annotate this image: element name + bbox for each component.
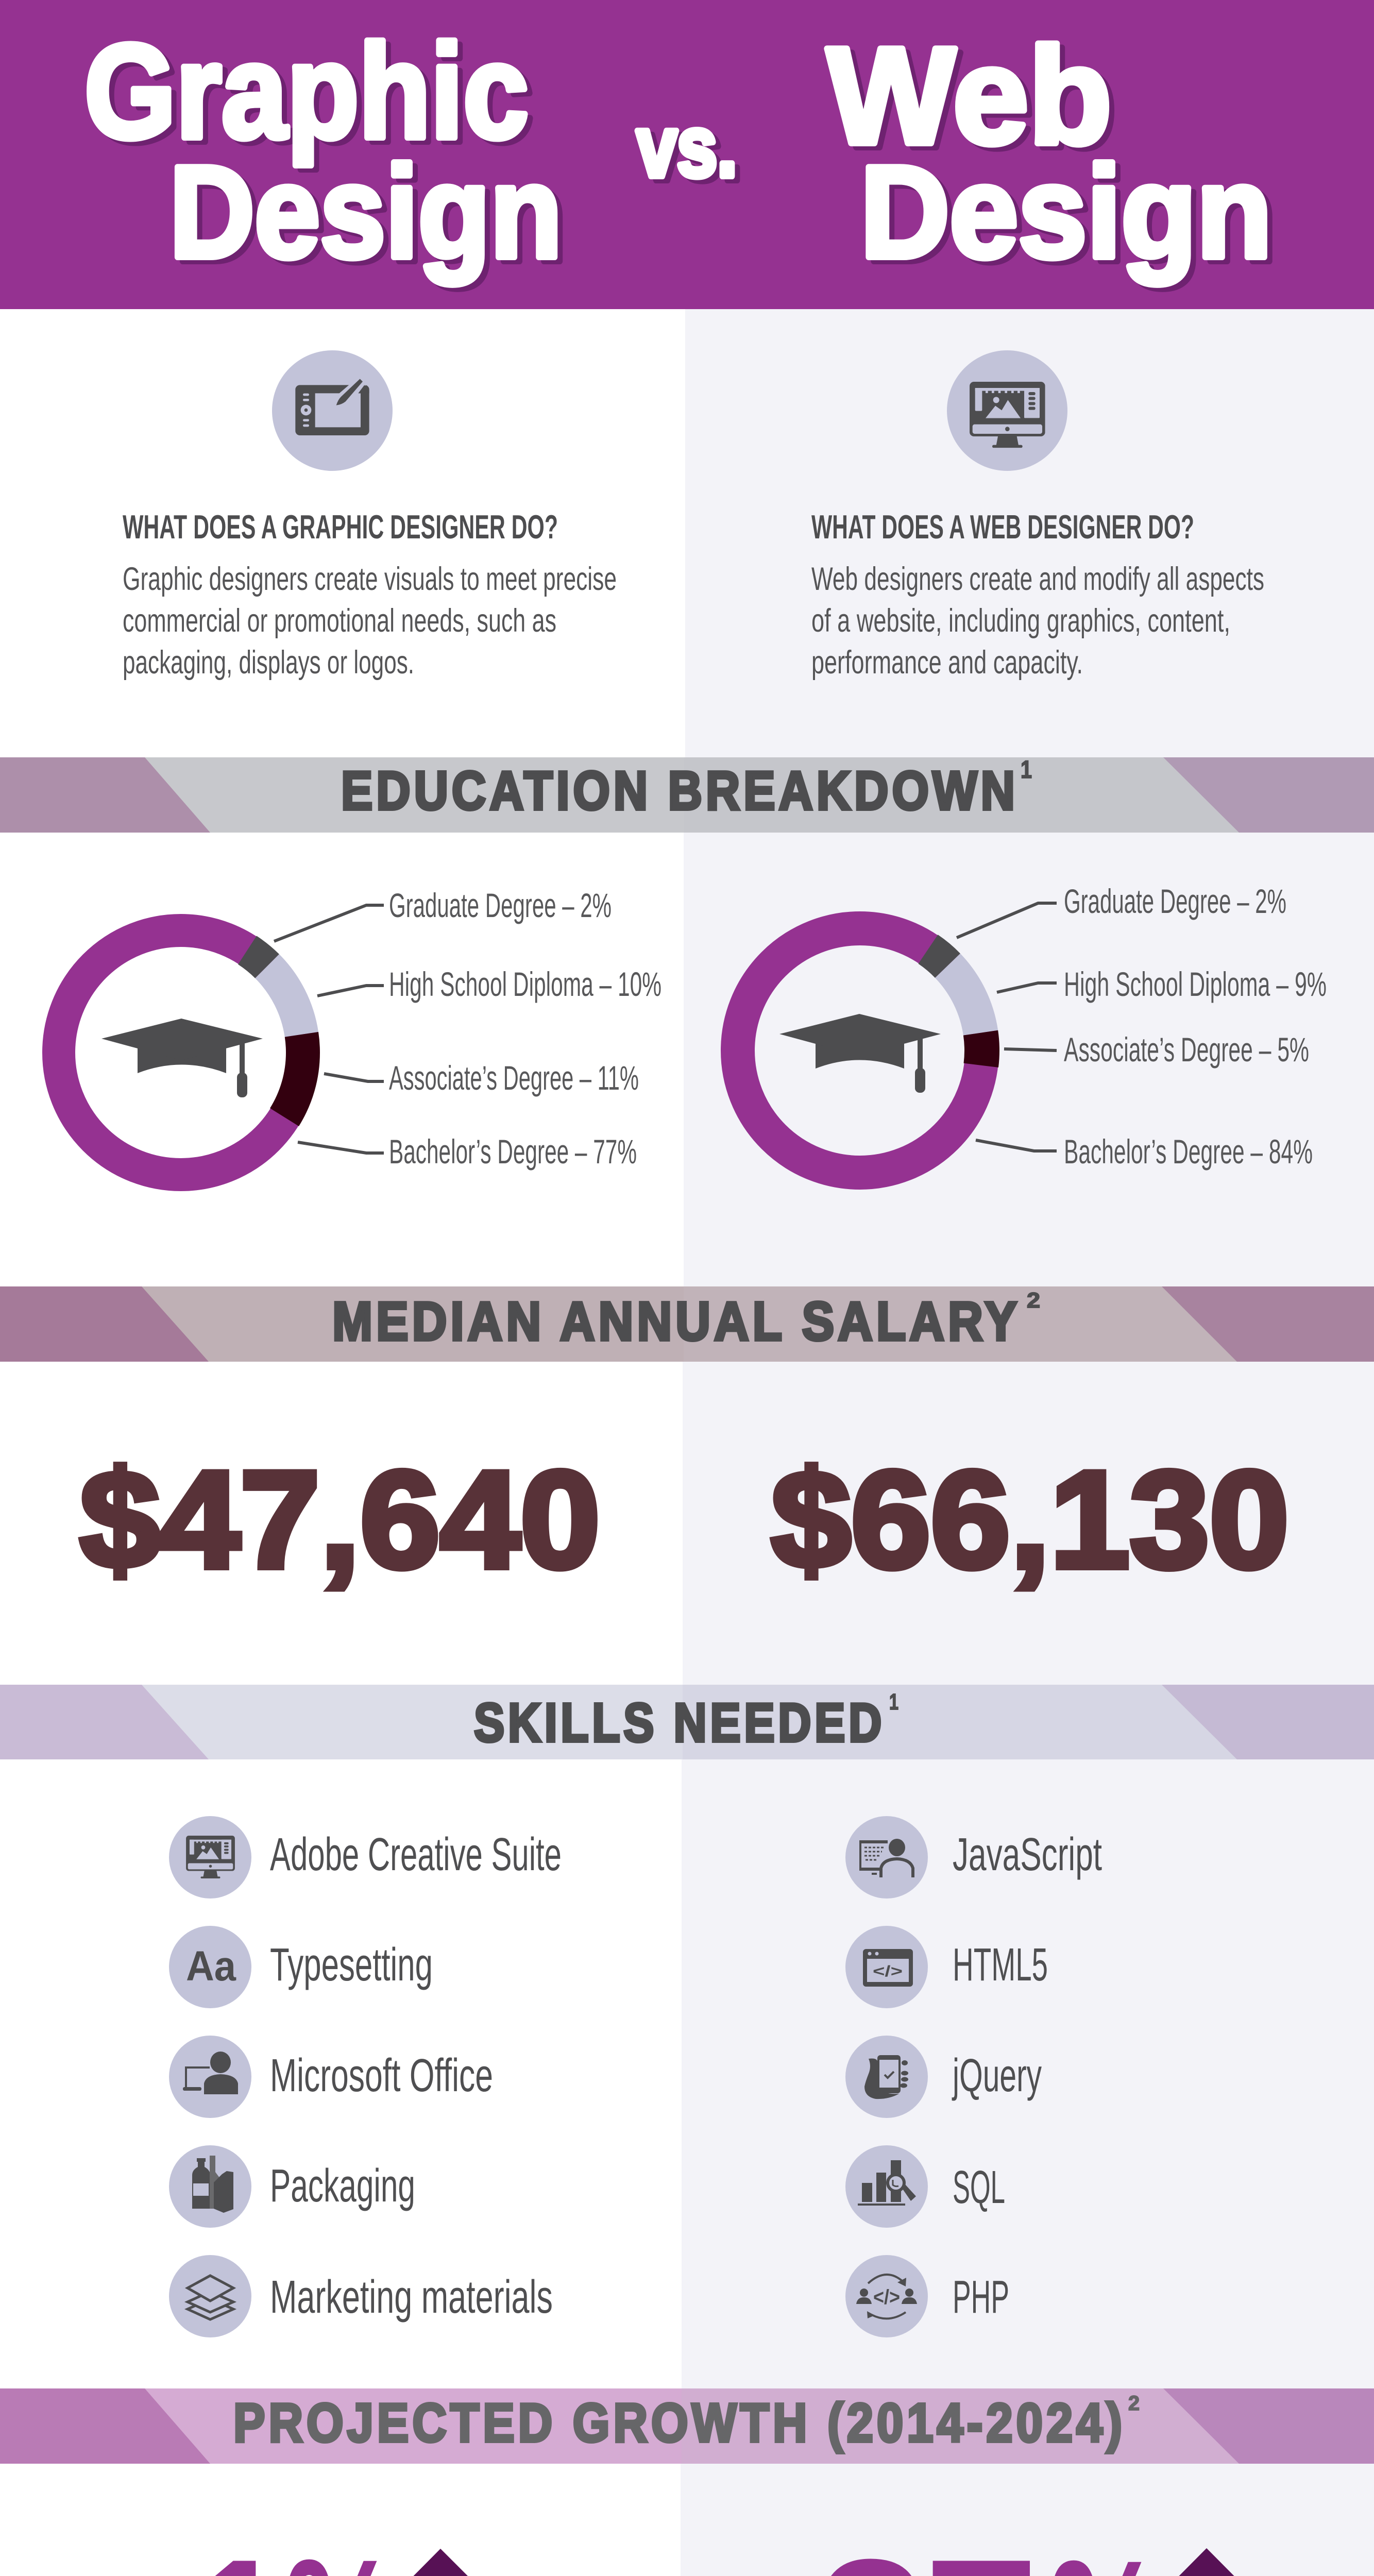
skill: microsoft office: Microsoft Office: [270, 2050, 493, 2102]
panel: web design skills: [845, 1816, 1102, 2337]
title: Design: [169, 139, 562, 285]
section banner: median annual salary: [0, 1286, 1374, 1362]
skill: html5: HTML5: [953, 1939, 1048, 1991]
panel: graphic design skills: [169, 1816, 562, 2337]
skill: html5: [845, 1926, 1048, 2008]
icon: drawing tablet: [272, 350, 393, 471]
skill: php: [845, 2255, 1009, 2337]
skill: typesetting: Aa: [186, 1943, 236, 1990]
title: vs.: [637, 99, 737, 195]
description: packaging, displays or logos.: [123, 645, 414, 681]
chart labels: graphic design education: High School Diploma – 10%: [389, 965, 661, 1003]
skill: sql: [845, 2145, 1005, 2228]
skill: marketing materials: [169, 2255, 553, 2337]
skill: packaging: [169, 2145, 415, 2228]
skill: javascript: [845, 1816, 1102, 1899]
panel: what does a graphic designer do: [123, 350, 617, 681]
title: Web: [827, 19, 1112, 173]
stat: web design growth 27%: [816, 2517, 1262, 2576]
section banner: skills needed: SKILLS NEEDED: [474, 1692, 885, 1753]
icon: desktop monitor: [947, 350, 1067, 471]
title: Design: [860, 139, 1272, 285]
skill: php: PHP: [953, 2272, 1009, 2323]
salary: web design: $66,130: [771, 1442, 1289, 1597]
stat: graphic design growth 1%: [196, 2516, 496, 2576]
chart labels: graphic design education: Bachelor’s Degree – 77%: [389, 1132, 637, 1171]
panel: what does a web designer do: [811, 350, 1264, 681]
arrow up: [385, 2549, 496, 2576]
description: Graphic designers create visuals to meet precise: [123, 561, 617, 597]
skill: typesetting: Typesetting: [270, 1939, 433, 1991]
chart labels: graphic design education: Graduate Degree – 2%: [389, 886, 612, 924]
arrow up: [1151, 2548, 1262, 2576]
skill: html5: </>: [873, 1963, 903, 1980]
header banner: [0, 0, 1374, 309]
skill: adobe creative suite: [169, 1816, 562, 1899]
icon: graduation cap: [779, 1014, 941, 1093]
chart labels: graphic design education: Associate’s Degree – 11%: [389, 1059, 639, 1097]
section banner: projected growth: PROJECTED GROWTH (2014-2024): [233, 2393, 1126, 2453]
heading: WHAT DOES A GRAPHIC DESIGNER DO?: [123, 508, 558, 546]
section banner: education breakdown: 1: [1021, 756, 1032, 784]
skill: typesetting: [169, 1926, 433, 2008]
skill: jquery: [845, 2036, 1042, 2118]
panel: right column background: [681, 309, 1374, 2576]
section banner: median annual salary: 2: [1027, 1288, 1040, 1312]
description: [811, 561, 1264, 681]
skill: php: </>: [873, 2286, 900, 2309]
skill: marketing materials: Marketing materials: [270, 2272, 553, 2323]
title: Graphic: [84, 17, 529, 167]
section banner: skills needed: 1: [889, 1689, 898, 1715]
description: [123, 561, 617, 681]
section banner: median annual salary: MEDIAN ANNUAL SALARY: [332, 1291, 1021, 1352]
skill: microsoft office: [169, 2036, 493, 2118]
section banner: skills needed: [0, 1685, 1374, 1759]
chart: graphic design education donut: [59, 930, 303, 1175]
section banner: education breakdown: [0, 756, 1374, 833]
description: commercial or promotional needs, such as: [123, 603, 556, 639]
chart labels: graphic design education: [274, 886, 661, 1171]
section banner: education breakdown: EDUCATION BREAKDOWN: [341, 760, 1019, 821]
salary: graphic design: $47,640: [80, 1442, 600, 1597]
skill: javascript: JavaScript: [953, 1829, 1102, 1880]
title: [84, 17, 1272, 285]
skill: packaging: Packaging: [270, 2160, 415, 2212]
skill: adobe creative suite: Adobe Creative Suite: [270, 1829, 562, 1880]
section banner: projected growth: [0, 2388, 1374, 2464]
skill: jquery: jQuery: [952, 2050, 1042, 2102]
description: performance and capacity.: [811, 645, 1083, 681]
section banner: projected growth: 2: [1128, 2392, 1140, 2415]
chart: web design education donut: [738, 928, 982, 1173]
icon: graduation cap: [101, 1019, 263, 1097]
chart labels: web design education: [957, 882, 1327, 1171]
skill: sql: SQL: [953, 2162, 1005, 2213]
